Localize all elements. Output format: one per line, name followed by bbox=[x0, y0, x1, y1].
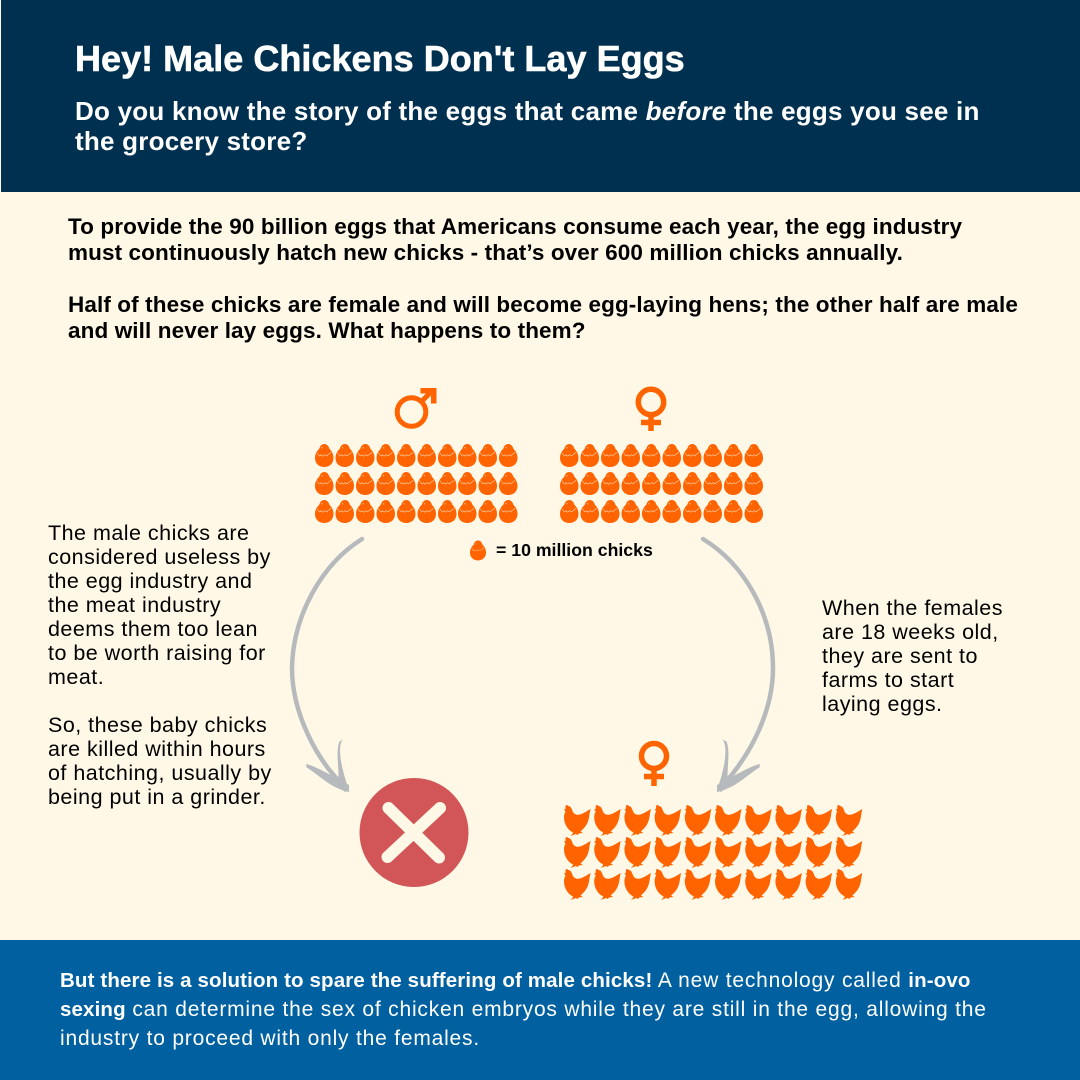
left text: male chicks: the meat industry bbox=[48, 593, 221, 617]
left text: male chicks: the egg industry and bbox=[48, 569, 252, 593]
footer text: industry to proceed with only the females. bbox=[60, 1027, 480, 1050]
icon: male symbol bbox=[397, 388, 436, 426]
icon: female symbol top bbox=[638, 389, 664, 431]
right text: females: are 18 weeks old, bbox=[822, 620, 999, 644]
footer band bbox=[0, 940, 1080, 1080]
right text: females: laying eggs. bbox=[822, 692, 943, 716]
subtitle: the grocery store? bbox=[75, 126, 307, 156]
left text: male chicks: are killed within hours bbox=[48, 737, 266, 761]
left text: male chicks: of hatching, usually by bbox=[48, 761, 272, 785]
left text: male chicks: meat. bbox=[48, 665, 104, 689]
intro text bbox=[68, 214, 1018, 343]
footer text: But there is a solution to spare the suffering of male chicks! A new technology called in-ovo bbox=[60, 969, 971, 992]
left text: male chicks: being put in a grinder. bbox=[48, 785, 266, 809]
arrow: females to farms bbox=[703, 539, 773, 792]
intro text: must continuously hatch new chicks - that’s over 600 million chicks annually. bbox=[68, 240, 903, 265]
icon: red cross bbox=[360, 778, 468, 887]
footer text: sexing can determine the sex of chicken embryos while they are still in the egg, allowing the bbox=[60, 998, 987, 1021]
hen pictogram bbox=[564, 805, 862, 900]
left text: male chicks: to be worth raising for bbox=[48, 641, 266, 665]
icon: female symbol lower bbox=[642, 744, 666, 786]
right text: females bbox=[822, 596, 1003, 716]
intro text: Half of these chicks are female and will become egg-laying hens; the other half are male bbox=[68, 292, 1018, 317]
left text: male chicks bbox=[48, 521, 272, 809]
left text: male chicks: considered useless by bbox=[48, 545, 271, 569]
right text: females: When the females bbox=[822, 596, 1003, 620]
left text: male chicks: So, these baby chicks bbox=[48, 713, 267, 737]
left text: male chicks: The male chicks are bbox=[48, 521, 250, 545]
subtitle: Do you know the story of the eggs that came before the eggs you see in bbox=[75, 96, 980, 126]
female chick pictogram bbox=[560, 444, 763, 523]
legend label: = 10 million chicks bbox=[496, 540, 653, 560]
intro text: and will never lay eggs. What happens to them? bbox=[68, 318, 586, 343]
header band bbox=[1, 0, 1080, 192]
left text: male chicks: deems them too lean bbox=[48, 617, 258, 641]
footer text bbox=[60, 969, 987, 1050]
intro text: To provide the 90 billion eggs that Americans consume each year, the egg industry bbox=[68, 214, 962, 239]
right text: females: farms to start bbox=[822, 668, 954, 692]
arrow: male chicks to rejection bbox=[292, 539, 362, 792]
icon: legend chick bbox=[470, 541, 486, 560]
right text: females: they are sent to bbox=[822, 644, 978, 668]
title: Hey! Male Chickens Don't Lay Eggs bbox=[75, 38, 685, 79]
subtitle bbox=[75, 96, 980, 156]
male chick pictogram bbox=[315, 444, 518, 523]
